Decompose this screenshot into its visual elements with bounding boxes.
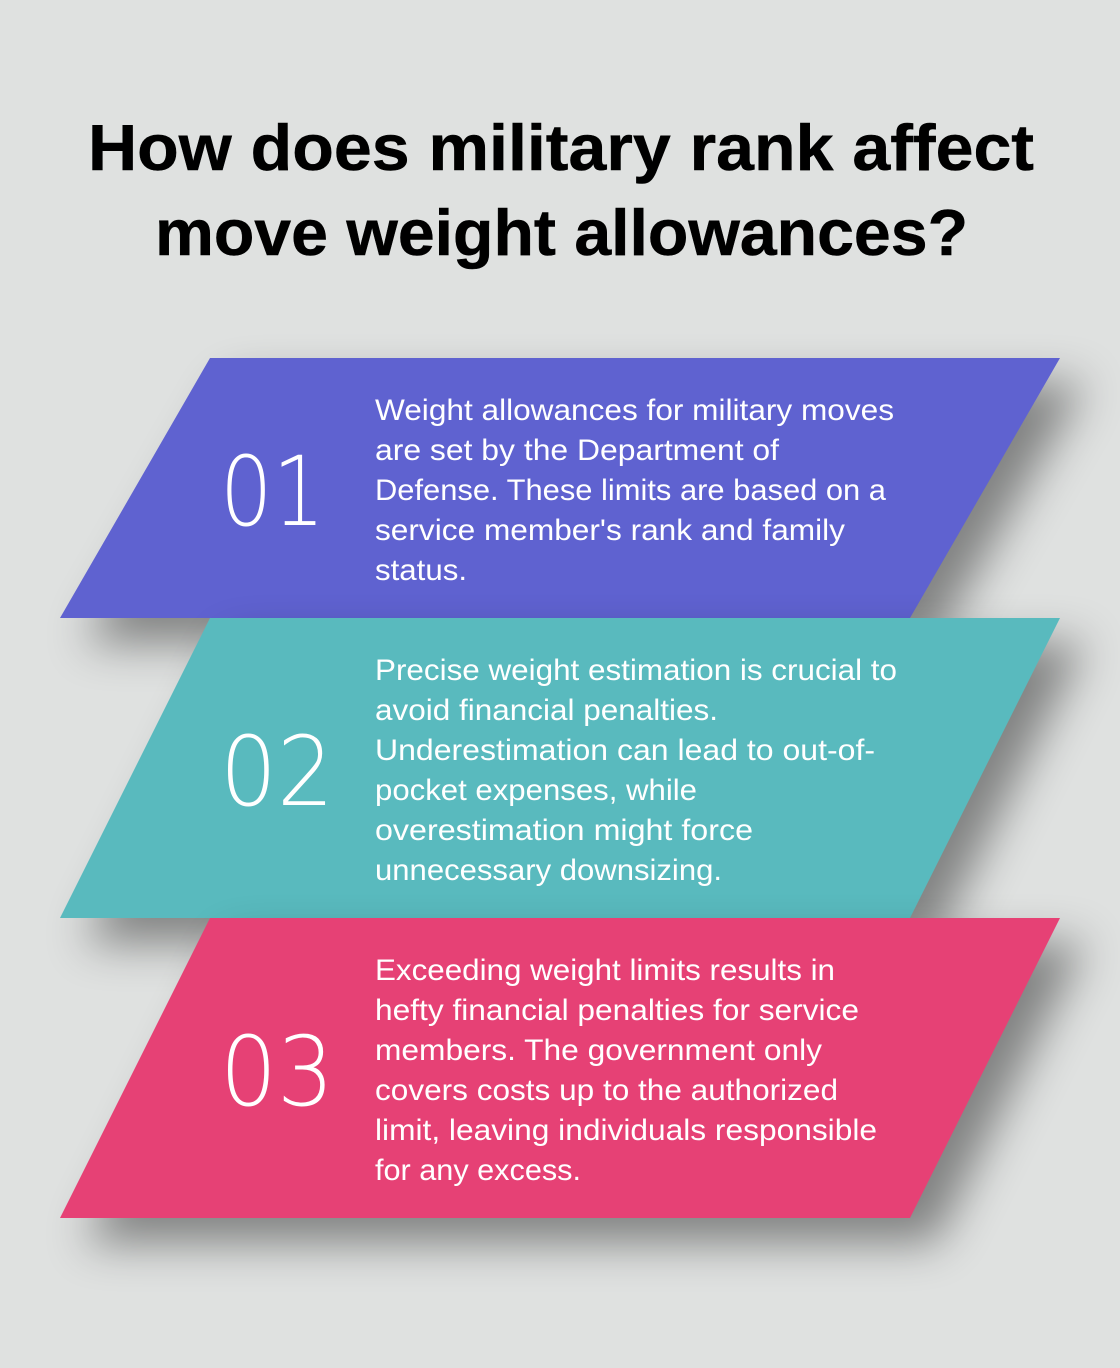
panel shape: teal parallelogram xyxy=(60,618,1060,918)
text block: step 01: service member's rank and family xyxy=(375,514,845,547)
text block: step 03: limit, leaving individuals responsible xyxy=(375,1114,877,1147)
panel shape: purple parallelogram xyxy=(60,358,1060,618)
panel: step 02 xyxy=(60,618,1060,918)
text block: step 02: avoid financial penalties. xyxy=(375,694,718,727)
text block: step 01 xyxy=(375,394,894,587)
number 02: 02 xyxy=(220,716,334,828)
title: How does military rank affect xyxy=(88,111,1034,184)
title: move weight allowances? xyxy=(155,196,968,269)
text block: step 02: pocket expenses, while xyxy=(375,774,697,807)
text block: step 02: overestimation might force xyxy=(375,814,753,847)
text block: step 03: for any excess. xyxy=(375,1154,581,1187)
text block: step 02: Precise weight estimation is crucial to xyxy=(375,654,897,687)
number 01: 01 xyxy=(220,436,325,548)
text block: step 01: status. xyxy=(375,554,467,587)
panel shape: pink parallelogram xyxy=(60,918,1060,1218)
text block: step 01: Weight allowances for military moves xyxy=(375,394,894,427)
text block: step 02 xyxy=(375,654,897,887)
text block: step 01: Defense. These limits are based on a xyxy=(375,474,886,507)
text block: step 01: are set by the Department of xyxy=(375,434,780,467)
text block: step 03 xyxy=(375,954,877,1187)
text block: step 02: unnecessary downsizing. xyxy=(375,854,722,887)
text block: step 03: members. The government only xyxy=(375,1034,822,1067)
number 03: 03 xyxy=(220,1016,334,1128)
text block: step 02: Underestimation can lead to out-of- xyxy=(375,734,875,767)
text block: step 03: covers costs up to the authorized xyxy=(375,1074,838,1107)
text block: step 03: hefty financial penalties for service xyxy=(375,994,859,1027)
panel: step 03 xyxy=(60,918,1060,1218)
panel: step 01 xyxy=(60,358,1060,618)
text block: step 03: Exceeding weight limits results in xyxy=(375,954,835,987)
title xyxy=(88,111,1034,269)
